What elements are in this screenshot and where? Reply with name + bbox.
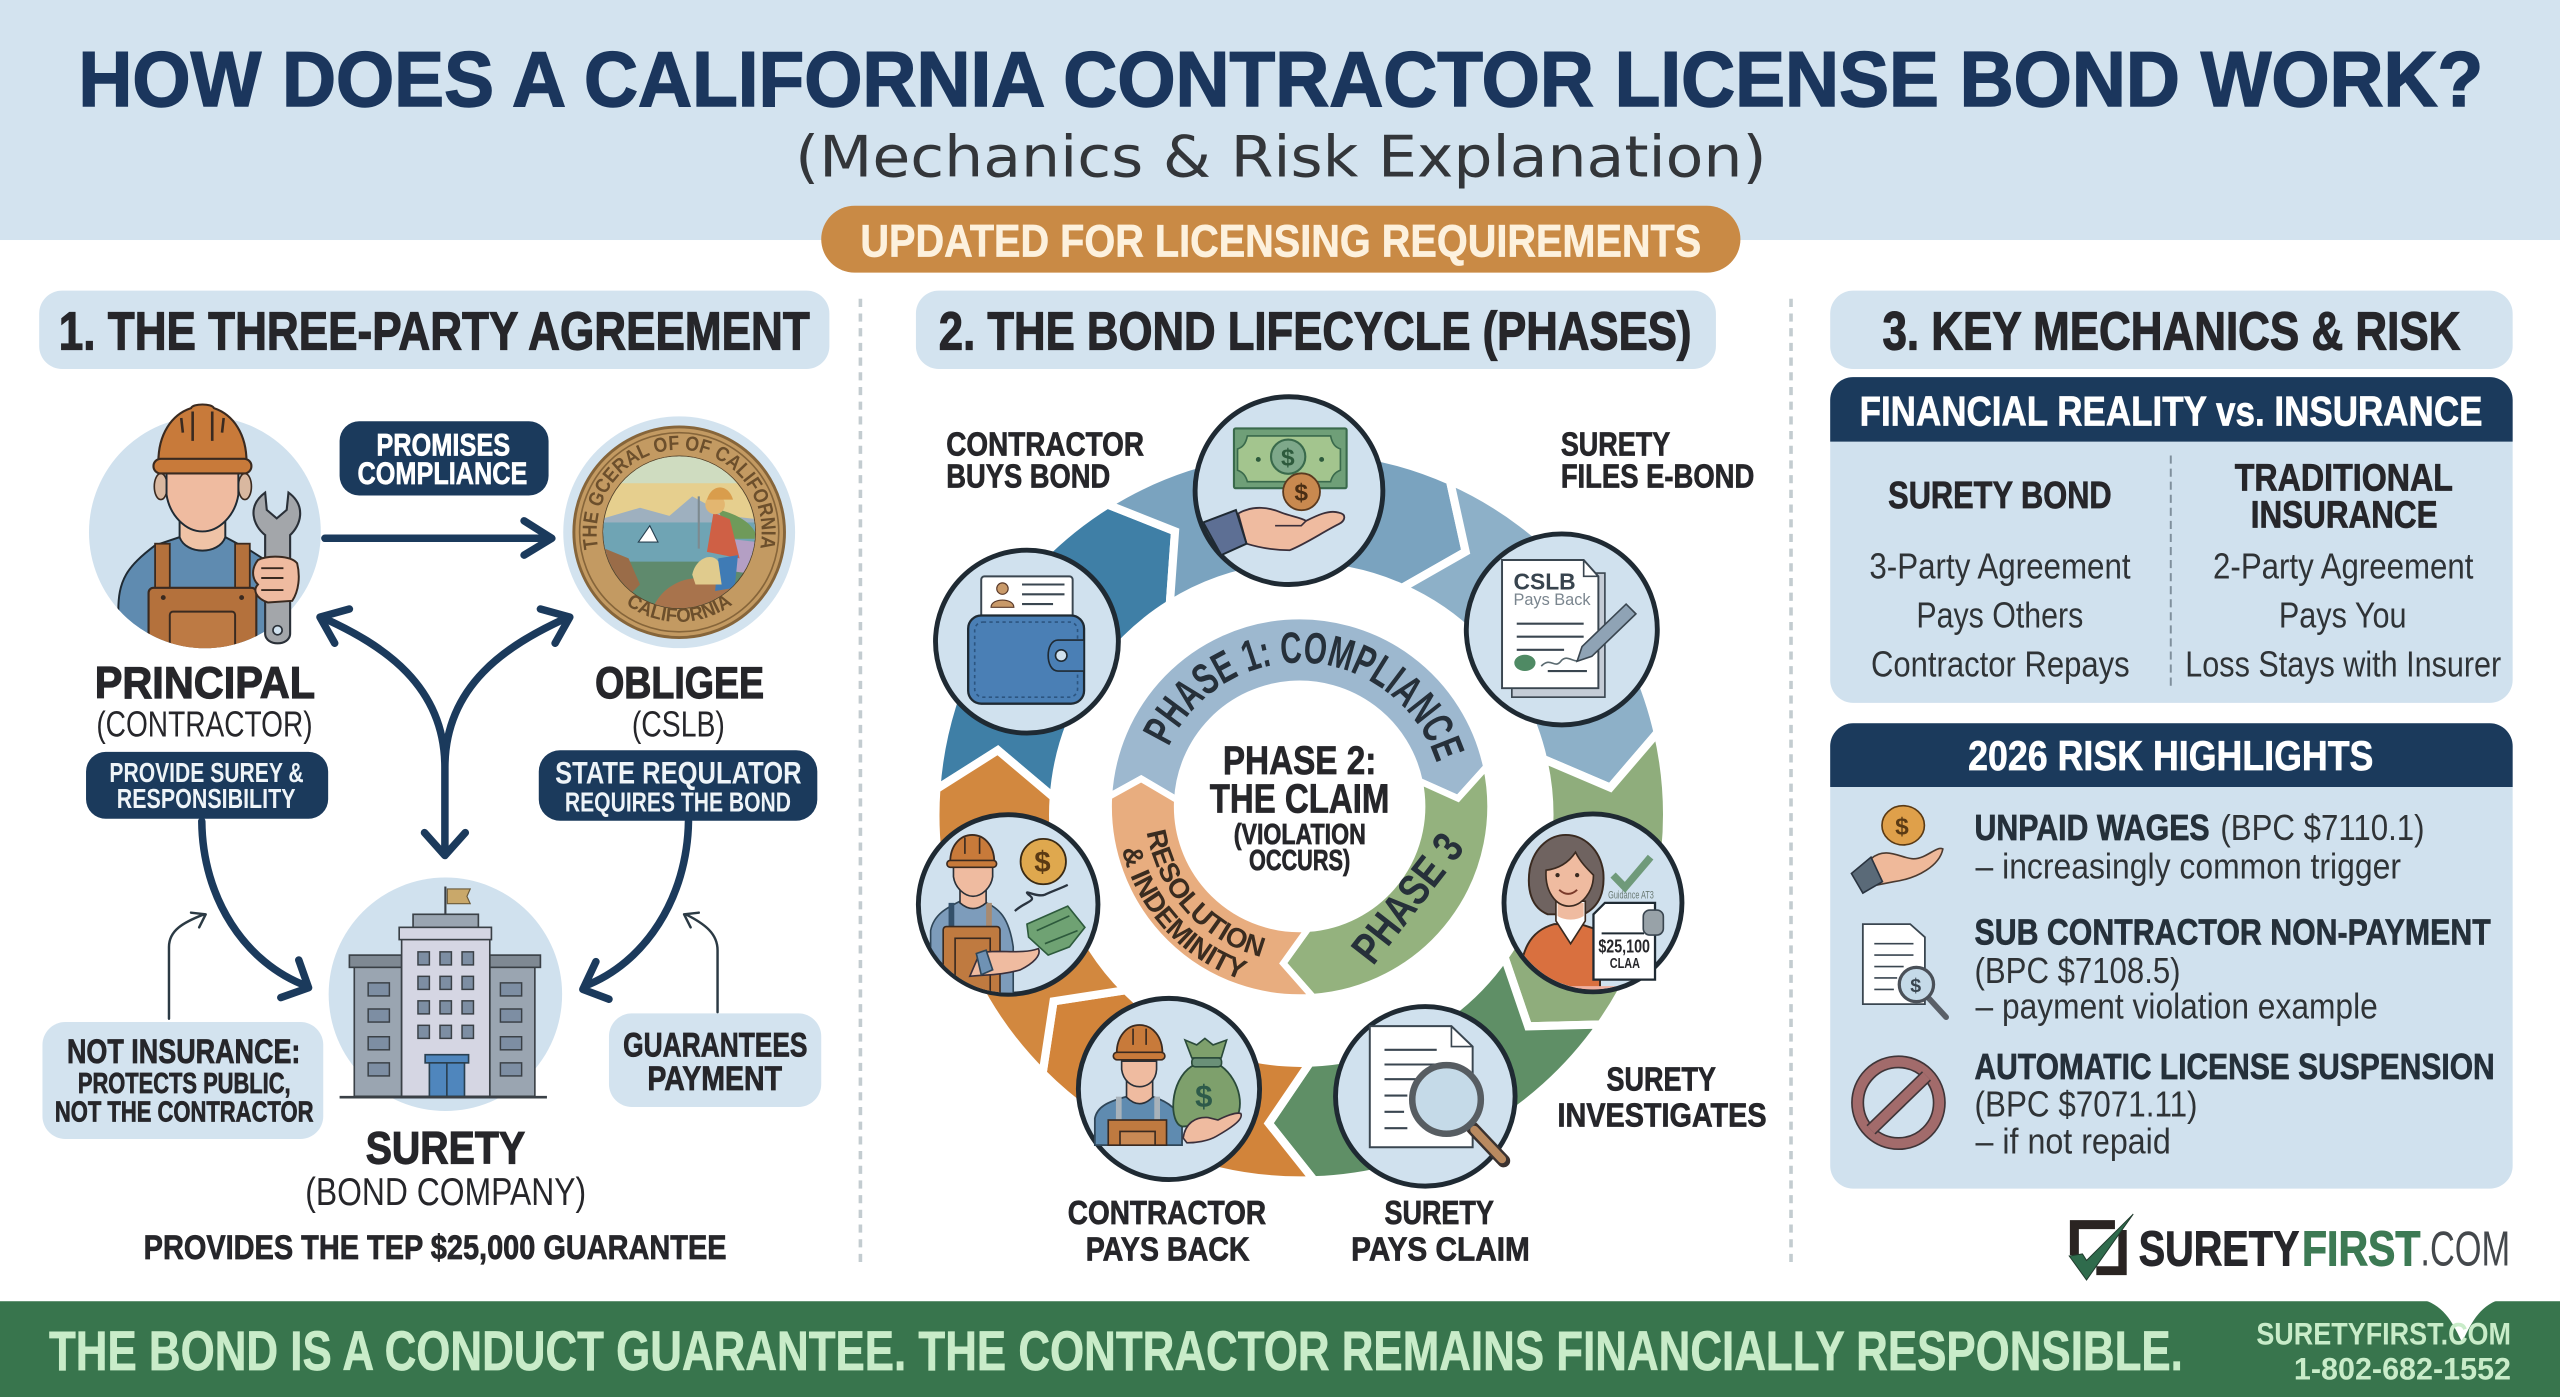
icon: contractor with money bag [1078, 998, 1260, 1180]
column: surety bond [1869, 474, 2131, 685]
arrow: principal to surety [202, 821, 309, 998]
arrow: not insurance note [169, 913, 206, 1019]
column: traditional insurance [2185, 456, 2501, 685]
icon: principal contractor [89, 404, 321, 656]
icon: woman investigator: Guidance AT3 [1608, 889, 1654, 901]
callout: not insurance: NOT INSURANCE: [67, 1033, 300, 1071]
label: surety files e-bond [1561, 427, 1754, 495]
icon: coin in hand [1851, 806, 1943, 893]
label: contractor buys bond: CONTRACTOR [946, 427, 1144, 464]
column: surety bond: Pays Others [1916, 595, 2083, 636]
label: obligee [595, 659, 764, 744]
callout: state regulator: REQUIRES THE BOND [565, 786, 791, 817]
panel: three-party agreement [39, 290, 830, 1267]
text: subcontractor non-payment [1975, 911, 2491, 1026]
panel: 2026 risk highlights [1830, 723, 2513, 1189]
icon: woman investigator: CLAA [1610, 956, 1640, 972]
text: phase 2 the claim: (VIOLATION [1234, 819, 1366, 851]
icon: money in hand: $ [1281, 444, 1295, 471]
label: surety files e-bond: FILES E-BOND [1561, 458, 1754, 495]
label: surety pays claim: PAYS CLAIM [1351, 1231, 1530, 1268]
label: surety pays claim: SURETY [1384, 1195, 1494, 1232]
text: unpaid wages: (BPC $7110.1) [2220, 807, 2424, 848]
label: surety files e-bond: SURETY [1561, 427, 1670, 464]
column: traditional insurance: 2-Party Agreement [2213, 545, 2473, 586]
panel: financial reality vs insurance [1830, 377, 2513, 703]
text: phase 3: PHASE 3 [1342, 824, 1473, 973]
text: resolution and indemnity: & INDEMINITY [1123, 848, 1248, 978]
text: resolution and indemnity: RESOLUTION [1146, 830, 1266, 957]
text: subcontractor non-payment: – payment violation example [1976, 985, 2378, 1026]
logo: SuretyFirst: FIRST [2302, 1222, 2420, 1276]
icon: California state seal: THE GCERAL OF OF CALIFORNIA [582, 436, 776, 550]
icon: document and magnifier [1336, 1007, 1515, 1186]
icon: signed document: CSLB [1513, 568, 1576, 594]
header band [0, 0, 2560, 240]
heading: risk highlights [1830, 723, 2513, 787]
icon: contractor with money bag: $ [1195, 1079, 1212, 1114]
callout: state regulator: STATE REQULATOR [555, 755, 802, 791]
label: contractor pays back [1068, 1195, 1266, 1268]
arrow: guarantees note [684, 913, 718, 1012]
icon: surety building [329, 878, 562, 1111]
label: contractor buys bond [946, 427, 1144, 495]
icon: signed document: Pays Back [1513, 591, 1591, 609]
panel: key mechanics and risk [1830, 291, 2513, 1280]
text: unpaid wages: UNPAID WAGES [1975, 807, 2210, 848]
updated badge: UPDATED FOR LICENSING REQUIREMENTS [860, 215, 1701, 266]
label: obligee: (CSLB) [632, 703, 725, 744]
column: traditional insurance: Loss Stays with Insurer [2185, 644, 2501, 685]
column: traditional insurance: TRADITIONAL [2235, 456, 2453, 498]
heading: section 1: 1. THE THREE-PARTY AGREEMENT [59, 301, 810, 361]
logo: SuretyFirst: SURETY [2139, 1222, 2299, 1276]
logo: SuretyFirst [2069, 1214, 2510, 1280]
text: footer contact: SURETYFIRST.COM [2256, 1316, 2511, 1352]
label: contractor pays back: CONTRACTOR [1068, 1195, 1266, 1232]
icon: wallet with ID [936, 550, 1118, 733]
column: traditional insurance: Pays You [2279, 595, 2407, 636]
text: subcontractor non-payment: (BPC $7108.5) [1975, 950, 2181, 991]
heading: financial reality [1830, 377, 2513, 442]
panel: bond lifecycle [916, 290, 1767, 1268]
icon: money in hand: $ [1294, 479, 1308, 506]
callout: promises compliance: COMPLIANCE [358, 455, 527, 491]
text: automatic license suspension: (BPC $7071.11) [1975, 1084, 2198, 1125]
callout: promises compliance: PROMISES [376, 427, 510, 463]
callout: guarantees payment: GUARANTEES [623, 1026, 808, 1064]
heading: section 1 [39, 291, 829, 369]
callout: promises compliance [340, 421, 549, 496]
subtitle: (Mechanics & Risk Explanation) [795, 124, 1767, 190]
footer band [0, 1300, 2560, 1397]
callout: not insurance: PROTECTS PUBLIC, [78, 1068, 291, 1100]
label: contractor buys bond: BUYS BOND [946, 458, 1110, 495]
callout: provide surety: PROVIDE SUREY & [109, 757, 304, 788]
icon: woman investigator: $25,100 [1598, 936, 1650, 957]
title: HOW DOES A CALIFORNIA CONTRACTOR LICENSE BOND WORK? [78, 37, 2483, 123]
column: surety bond: SURETY BOND [1888, 474, 2112, 516]
callout: guarantees payment: PAYMENT [647, 1060, 782, 1098]
label: surety: SURETY [366, 1122, 525, 1173]
text: phase 1 compliance: PHASE 1: COMPLIANCE [1142, 632, 1464, 762]
callout: state regulator [539, 750, 817, 821]
text: guarantee note: PROVIDES THE TEP $25,000 GUARANTEE [144, 1229, 727, 1267]
heading: section 2: 2. THE BOND LIFECYCLE (PHASES) [939, 301, 1691, 361]
icon: California state seal: CALIFORNIA [628, 595, 732, 622]
icon: coin in hand: $ [1895, 813, 1909, 840]
text: phase 2 the claim [1210, 739, 1389, 877]
text: automatic license suspension: – if not repaid [1976, 1121, 2171, 1162]
icon: money in hand [1195, 397, 1383, 584]
icon: signed document [1466, 534, 1657, 725]
column: traditional insurance: INSURANCE [2251, 493, 2438, 535]
text: unpaid wages [1975, 807, 2424, 886]
arrow: obligee to surety [583, 821, 688, 999]
icon: contractor paying [918, 815, 1098, 1000]
updated badge [821, 206, 1740, 273]
arrow: principal to obligee [325, 521, 552, 555]
icon: prohibited sign [1858, 1062, 1939, 1144]
label: contractor pays back: PAYS BACK [1086, 1231, 1250, 1268]
text: unpaid wages: – increasingly common trigger [1976, 845, 2401, 886]
callout: provide surety: RESPONSIBILITY [117, 783, 296, 814]
text: footer contact [2256, 1316, 2511, 1387]
icon: woman investigator [1504, 814, 1682, 999]
callout: not insurance: NOT THE CONTRACTOR [55, 1097, 314, 1129]
icon: California state seal [563, 416, 795, 648]
label: surety investigates [1558, 1062, 1767, 1135]
heading: risk highlights: 2026 RISK HIGHLIGHTS [1968, 732, 2373, 779]
logo: SuretyFirst: .COM [2420, 1222, 2510, 1276]
text: phase 2 the claim: OCCURS) [1249, 845, 1350, 877]
text: footer contact: 1-802-682-1552 [2294, 1351, 2511, 1387]
heading: section 2 [916, 291, 1716, 369]
label: surety: (BOND COMPANY) [305, 1171, 586, 1214]
chart: inner phase ring [1112, 619, 1488, 994]
label: principal: (CONTRACTOR) [96, 703, 313, 744]
label: surety pays claim [1351, 1195, 1530, 1268]
callout: guarantees payment [609, 1013, 821, 1107]
column: surety bond: 3-Party Agreement [1869, 545, 2131, 586]
icon: document with magnifier: $ [1910, 975, 1921, 997]
chart: outer lifecycle ring [935, 449, 1667, 1180]
label: principal [95, 659, 315, 744]
heading: section 3 [1830, 291, 2513, 369]
segment: resolution [1109, 779, 1313, 998]
label: obligee: OBLIGEE [595, 659, 764, 708]
callout: not insurance [42, 1022, 323, 1139]
column: surety bond: Contractor Repays [1871, 644, 2130, 685]
segment: phase 1 [1109, 616, 1486, 800]
label: surety investigates: INVESTIGATES [1558, 1098, 1767, 1135]
arrow: three-way connector [320, 609, 570, 856]
callout: provide surety [86, 752, 328, 819]
text: automatic license suspension [1975, 1046, 2495, 1162]
label: surety investigates: SURETY [1607, 1062, 1716, 1099]
text: phase 2 the claim: THE CLAIM [1210, 775, 1389, 821]
icon: document with magnifier [1863, 924, 1946, 1017]
segment: phase 3 [1283, 767, 1491, 997]
label: principal: PRINCIPAL [95, 659, 315, 708]
icon: contractor paying: $ [1034, 846, 1051, 879]
text: phase 2 the claim: PHASE 2: [1223, 739, 1376, 783]
label: surety [305, 1122, 586, 1214]
